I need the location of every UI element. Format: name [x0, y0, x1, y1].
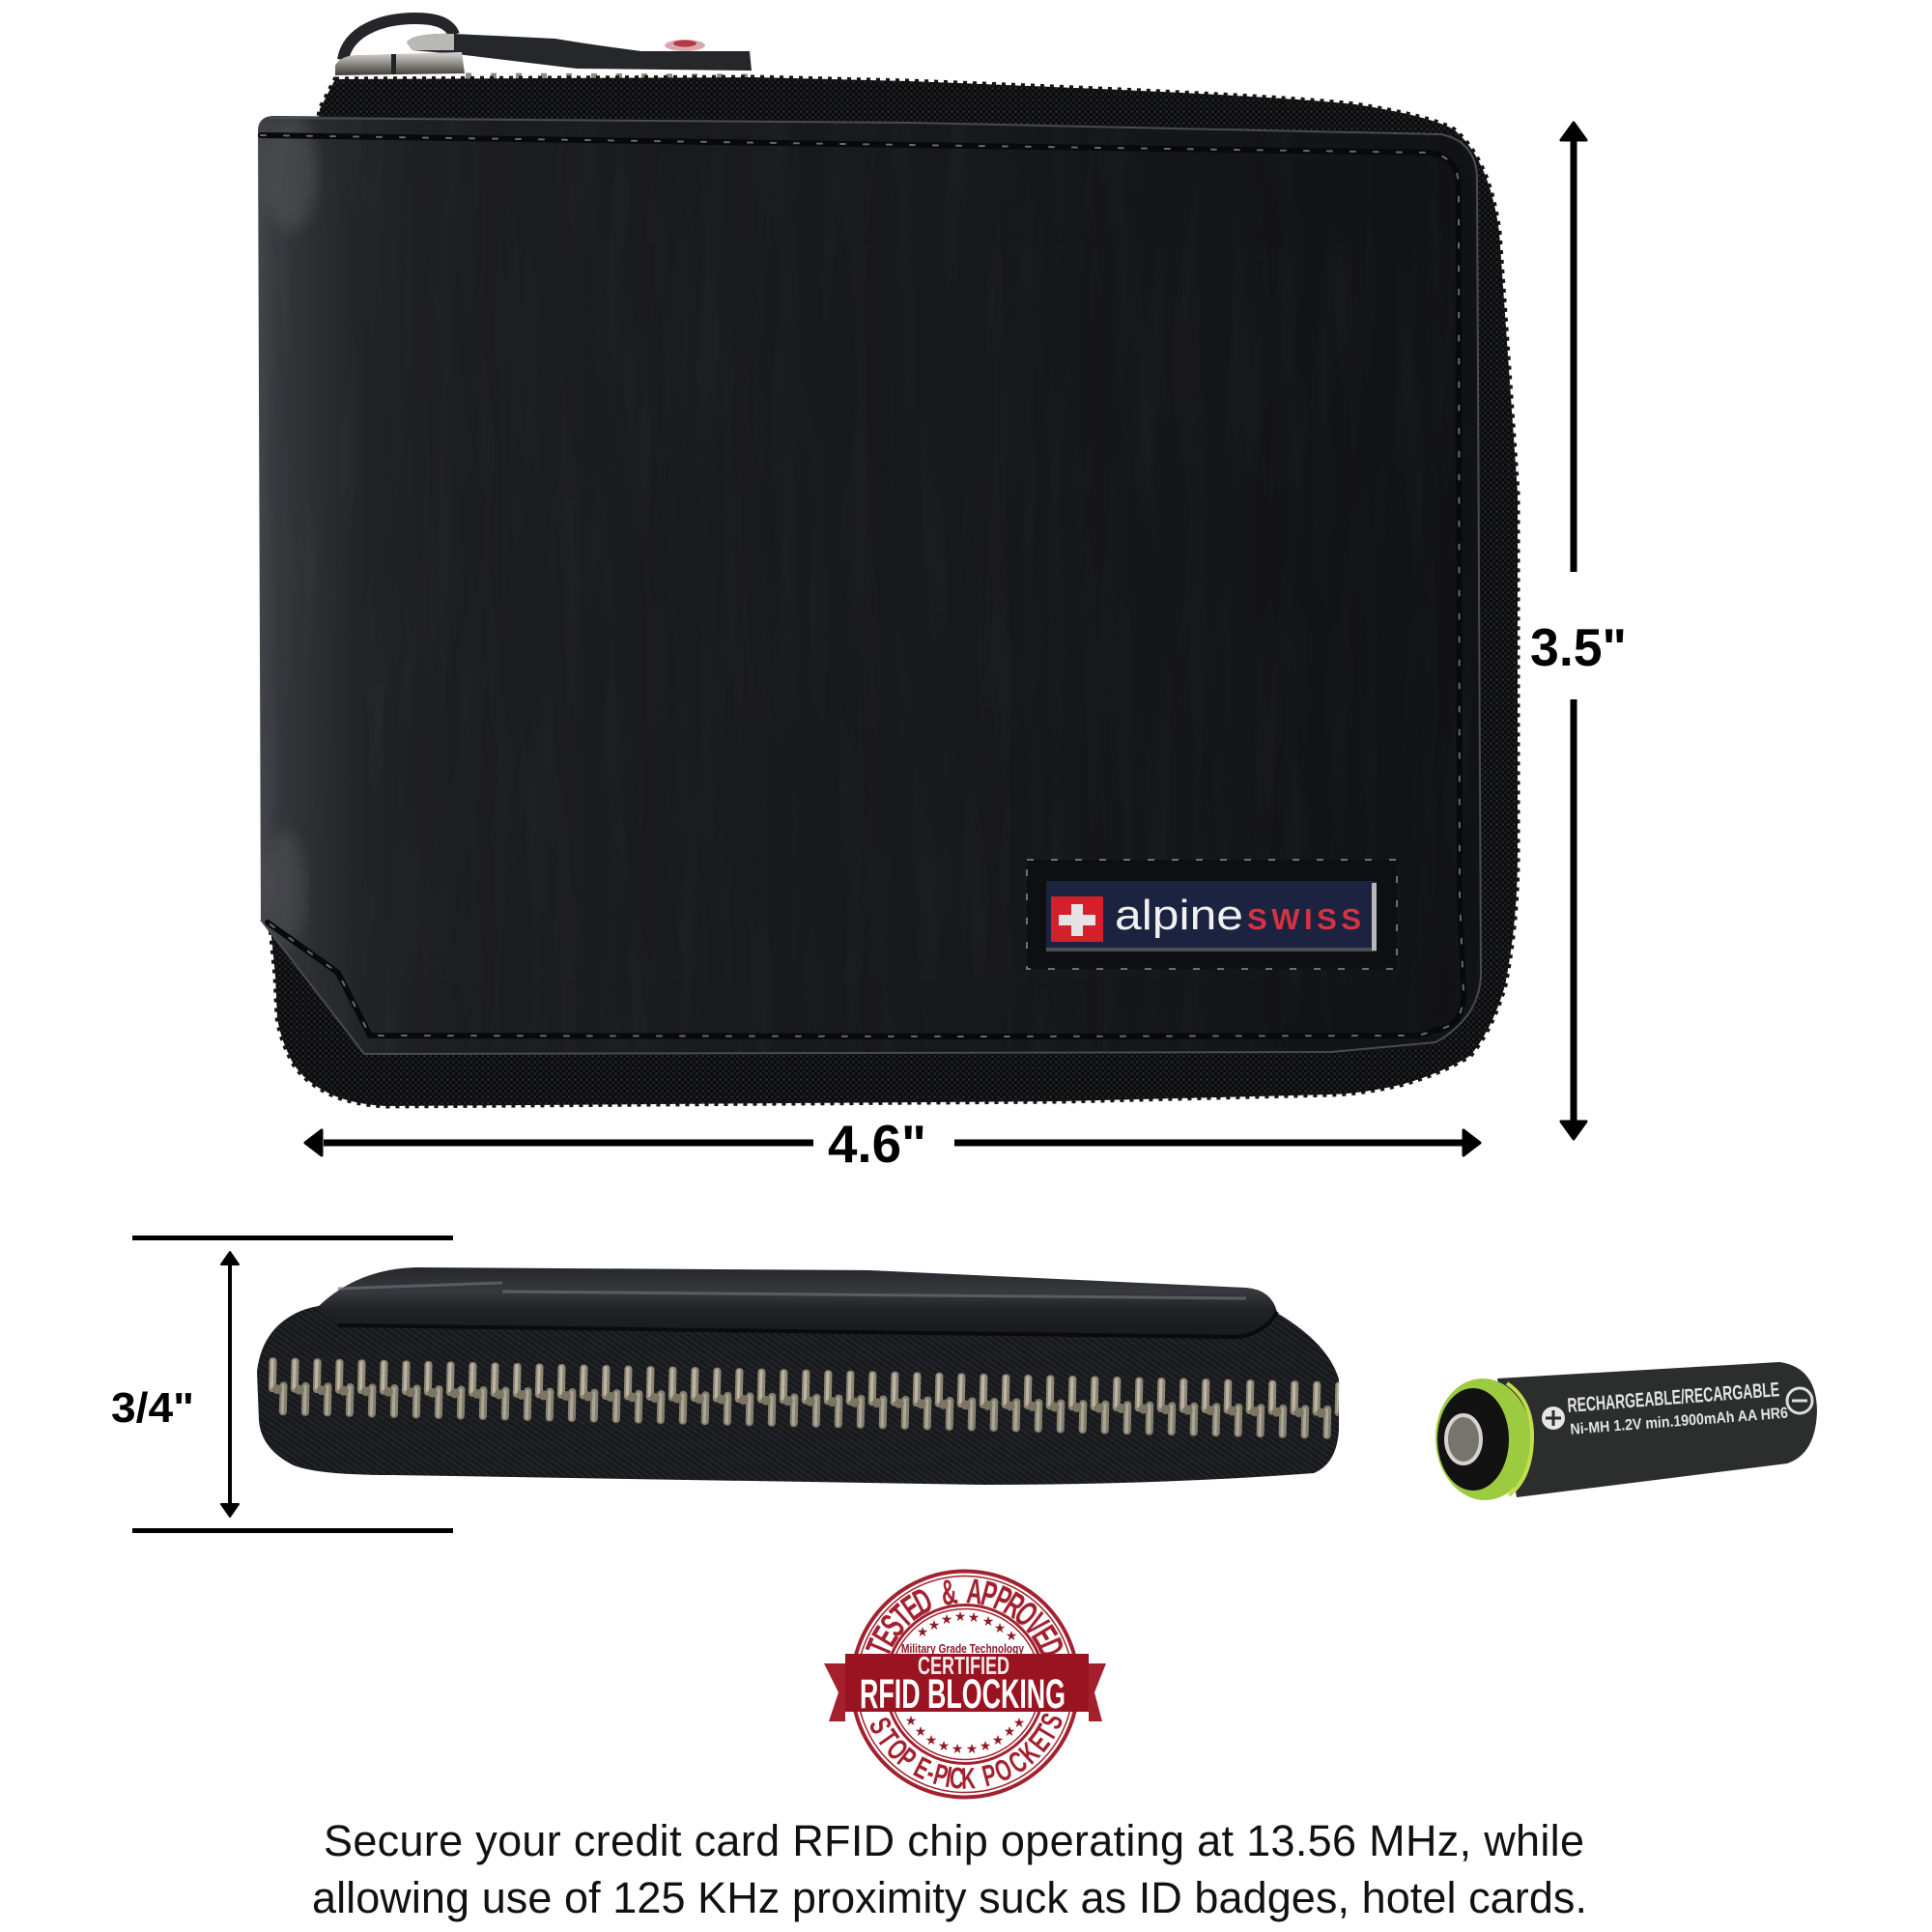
seal rings	[852, 1571, 1078, 1797]
caption text: Secure your credit card RFID chip operating at 13.56 MHz, while	[324, 1816, 1584, 1865]
seal upper arc text: E	[865, 1620, 906, 1653]
ribbon	[824, 1663, 845, 1721]
zipper pull and slider	[335, 18, 752, 75]
seal lower arc text: E	[909, 1749, 936, 1786]
alpine swiss woven label: alpine	[1115, 892, 1243, 939]
seal lower arc text: T	[1028, 1719, 1064, 1747]
seal upper arc text: V	[1016, 1606, 1056, 1643]
badge: certified RFID blocking seal: RFID BLOCKING	[860, 1671, 1065, 1718]
label: 4.6: 4.6"	[828, 1114, 926, 1174]
seal upper arc text: T	[859, 1634, 900, 1662]
battery printed text: RECHARGEABLE/RECARGABLE	[1567, 1378, 1780, 1417]
seal upper arc text: D	[907, 1580, 939, 1623]
dimension: depth 3/4 inch	[111, 1236, 453, 1533]
dimension: height 3.5 inches	[1530, 123, 1627, 1139]
battery printed text: Ni-MH 1.2V min.1900mAh AA HR6	[1570, 1406, 1789, 1438]
seal upper arc text: &	[938, 1572, 960, 1614]
alpine swiss woven label: SWISS	[1247, 902, 1361, 936]
zipper teeth along top edge	[466, 76, 753, 77]
caption text	[312, 1816, 1587, 1922]
side fabric body	[257, 1306, 1339, 1485]
seal lower arc text: P	[979, 1757, 1000, 1793]
photo: AA battery for scale	[1433, 1362, 1817, 1503]
seal lower arc text: C	[949, 1760, 965, 1796]
label: 3/4: 3/4"	[111, 1384, 194, 1432]
seal lower arc text: P	[892, 1741, 923, 1776]
dimension: width 4.6 inches	[305, 1114, 1480, 1174]
seal lower arc text: E	[1022, 1726, 1057, 1758]
seal lower arc text: S	[863, 1712, 898, 1739]
label patch stitching	[1027, 860, 1397, 969]
badge: certified RFID blocking seal	[824, 1571, 1106, 1797]
seal lower arc text: I	[943, 1759, 954, 1794]
caption text: allowing use of 125 KHz proximity suck as ID badges, hotel cards.	[312, 1873, 1587, 1922]
photo: wallet front view	[258, 18, 1518, 1106]
seal lower arc text: T	[870, 1723, 905, 1753]
battery printed text	[1567, 1378, 1789, 1438]
leather front panel	[258, 116, 1485, 1058]
seal upper arc text: P	[977, 1574, 1001, 1615]
seal upper arc text	[859, 1572, 1072, 1662]
label: 3.5: 3.5"	[1530, 617, 1627, 677]
leather edge stitching	[261, 135, 1463, 1037]
seal lower arc text: O	[989, 1751, 1017, 1789]
seal upper arc text: D	[1029, 1634, 1072, 1662]
seal lower arc text: O	[880, 1732, 915, 1767]
seal upper arc text: E	[895, 1588, 929, 1629]
seal lower arc text	[863, 1708, 1070, 1796]
seal upper arc text: R	[997, 1584, 1032, 1627]
ribbon text: CERTIFIED	[918, 1651, 1009, 1680]
seal lower arc text: K	[1012, 1736, 1046, 1771]
seal lower arc text: K	[960, 1761, 976, 1796]
seal upper arc text: T	[883, 1597, 921, 1635]
seal upper arc text: S	[873, 1607, 913, 1644]
seal stars: ★★★★★★★★★★★★★★★★★★	[905, 1608, 1025, 1756]
seal motto: Military Grade Technology	[901, 1641, 1025, 1656]
seal lower arc text: S	[1034, 1708, 1070, 1734]
brass zipper teeth	[268, 1357, 1339, 1439]
seal upper arc text: P	[988, 1578, 1017, 1621]
seal upper arc text: E	[1024, 1619, 1065, 1652]
seal lower arc text: -	[923, 1755, 941, 1789]
seal lower arc text: C	[1002, 1744, 1033, 1780]
alpine swiss woven label	[1046, 881, 1377, 952]
photo: wallet side view	[257, 1267, 1339, 1485]
seal upper arc text: O	[1007, 1594, 1045, 1634]
side leather top	[319, 1267, 1277, 1337]
seal upper arc text: A	[965, 1572, 984, 1612]
zipper fabric band	[270, 77, 1518, 1106]
seal lower arc text: P	[930, 1757, 952, 1793]
